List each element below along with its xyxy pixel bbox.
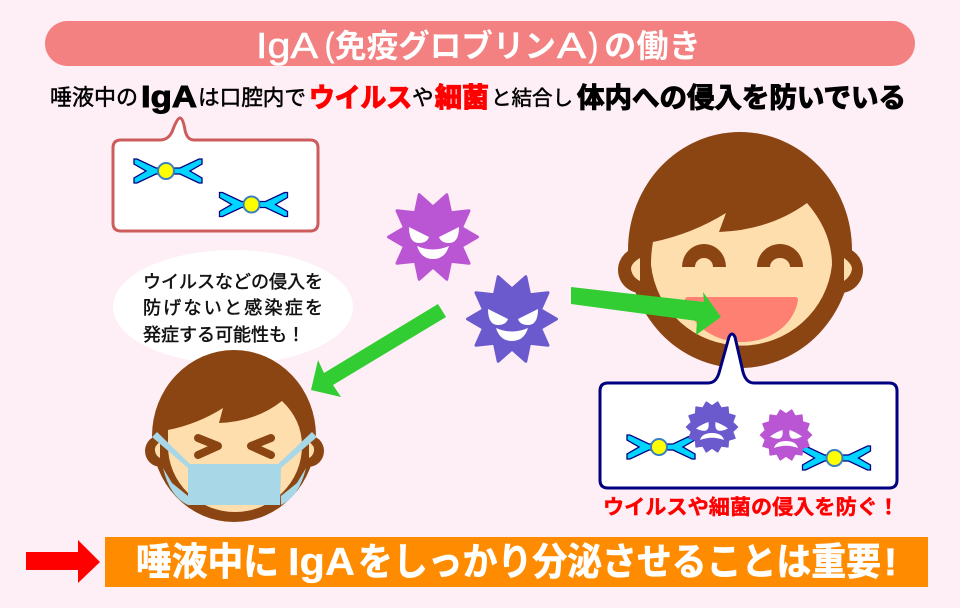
subtitle sentence	[50, 79, 906, 114]
title text	[256, 25, 701, 66]
face skin	[651, 203, 832, 346]
icon: sad blue virus	[686, 402, 738, 452]
title banner	[45, 21, 915, 66]
left ear	[145, 435, 177, 467]
callout: IgA binding viruses	[600, 334, 897, 488]
speech bubble: 発症する可能性も！	[143, 325, 305, 345]
conclusion text: IgA	[288, 540, 355, 583]
inner ears	[155, 442, 314, 458]
title text: IgA	[256, 25, 318, 66]
icon: blue virus	[468, 277, 556, 361]
subtitle sentence: ウイルス	[309, 83, 412, 113]
speech bubble	[113, 250, 353, 364]
icon: sad purple virus	[760, 410, 812, 460]
subtitle sentence: 細菌	[435, 83, 489, 113]
conclusion text: をしっかり分泌させることは重要	[358, 541, 881, 583]
open mouth	[685, 297, 798, 342]
icon: purple virus	[388, 195, 478, 279]
callout caption: ウイルスや細菌の侵入を防ぐ！	[603, 496, 899, 519]
face skin	[168, 401, 302, 512]
speech bubble: ウイルスなどの侵入を	[143, 272, 323, 292]
title text: A	[557, 25, 586, 66]
subtitle sentence: IgA	[141, 79, 197, 114]
subtitle sentence: と結合し	[491, 87, 573, 110]
right ear	[817, 247, 863, 293]
subtitle sentence: は口腔内で	[198, 85, 306, 110]
title text: の働き	[604, 28, 701, 64]
subtitle sentence: 体内への侵入を防いでいる	[577, 82, 906, 113]
title text: )	[589, 26, 598, 63]
conclusion text: !	[884, 541, 897, 583]
conclusion bar	[105, 537, 928, 587]
large smiling face	[618, 132, 863, 368]
closed eyes	[198, 438, 271, 455]
left ear	[618, 247, 664, 293]
subtitle sentence: や	[412, 85, 434, 110]
head hair	[628, 132, 852, 368]
red arrow	[26, 540, 100, 583]
face mask	[152, 432, 317, 505]
right ear	[292, 435, 324, 467]
icon: antibody left	[627, 435, 695, 459]
arrow: virus to mouth	[571, 287, 721, 335]
callout: IgA antibodies	[113, 118, 318, 231]
title text: (	[325, 26, 334, 63]
icon: antibody 1	[134, 159, 202, 183]
head hair	[152, 350, 316, 522]
icon: antibody 2	[220, 192, 288, 216]
title text: 免疫グロブリン	[335, 28, 556, 64]
arrow: virus to masked face	[311, 304, 446, 397]
conclusion text: 唾液中に	[136, 541, 279, 583]
icon: antibody right	[802, 446, 870, 470]
smiling eyes	[682, 244, 803, 267]
subtitle sentence: 唾液中の	[50, 85, 138, 110]
speech bubble: 防げないと感染症を	[143, 298, 323, 318]
conclusion text	[136, 540, 897, 583]
inner ears	[631, 258, 852, 281]
small masked face	[145, 350, 324, 522]
